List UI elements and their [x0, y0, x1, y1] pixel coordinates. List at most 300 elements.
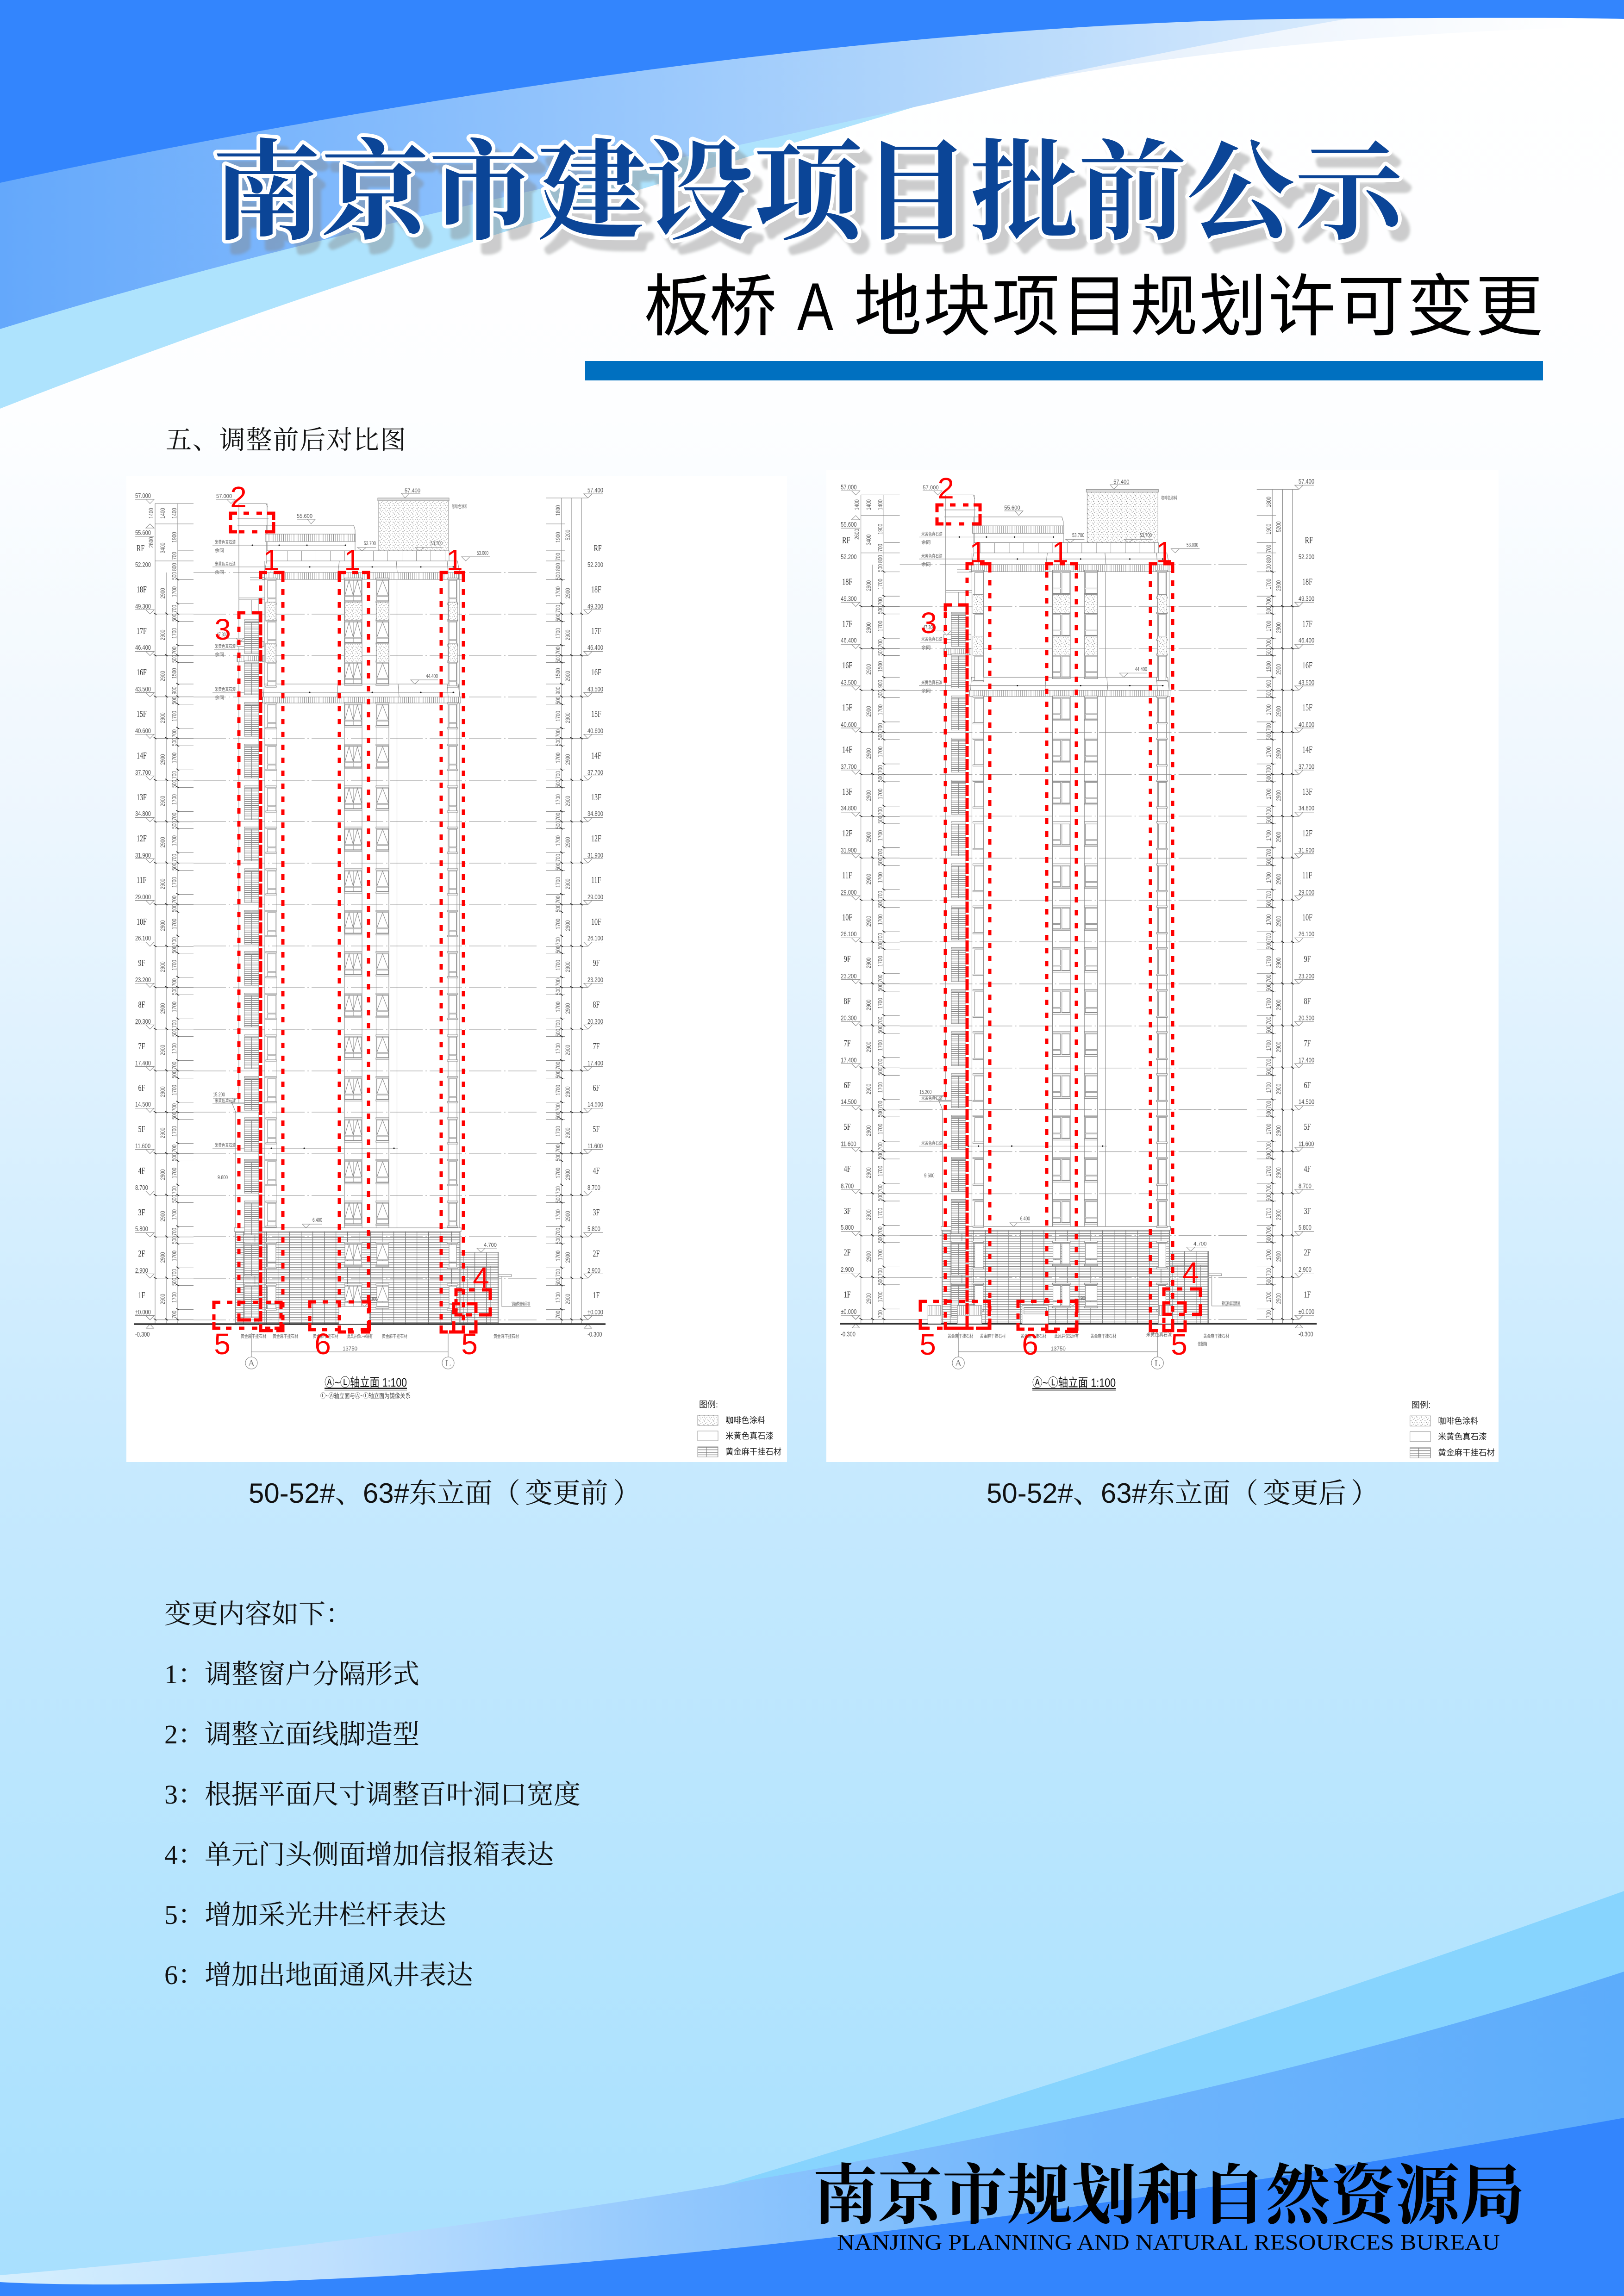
section heading: 五、调整前后对比图	[166, 420, 406, 457]
material notes: 黄金麻干挂石材	[313, 1333, 338, 1339]
floor labels left: 14F	[137, 751, 147, 761]
floor labels right: 1F	[1304, 1289, 1311, 1300]
top dimension labels: 800	[876, 555, 884, 563]
axis labels	[955, 1358, 1160, 1369]
top dimension labels: 700	[170, 552, 178, 560]
elevation labels right: 34.800	[1299, 804, 1314, 812]
axis labels: L	[1155, 1358, 1160, 1369]
footer swoosh: mid blue layer	[0, 1972, 1624, 2296]
elevation labels right: ±0.000	[587, 1308, 603, 1316]
elevation labels left: 11.600	[841, 1140, 856, 1148]
floor labels left: 5F	[844, 1121, 851, 1132]
elevation labels left: 29.000	[841, 888, 856, 896]
floor labels right: 4F	[593, 1166, 600, 1176]
material notes: 黄金麻干挂石材	[1203, 1333, 1229, 1339]
elevation labels left: 52.200	[135, 560, 151, 568]
elevation labels right: 43.500	[1299, 678, 1314, 686]
axis labels: A	[955, 1358, 962, 1369]
floor labels left: 6F	[138, 1083, 145, 1093]
floor labels left: 18F	[137, 585, 147, 595]
elevation labels left: 11.600	[135, 1142, 150, 1150]
building elevation marks: 57.000	[216, 493, 232, 499]
floor labels left: 18F	[842, 576, 852, 587]
top dimension labels: 800	[1265, 555, 1272, 563]
building elevation marks: 6.400	[312, 1217, 322, 1223]
floor labels left: 2F	[844, 1247, 851, 1257]
building elevation marks: 53.000	[1187, 542, 1198, 548]
material notes: 余同	[215, 548, 224, 554]
elevation labels left: 20.300	[841, 1014, 856, 1022]
elevation labels right: 5.800	[587, 1225, 600, 1232]
elevation labels left	[135, 492, 151, 1338]
floor labels left: 1F	[138, 1290, 145, 1300]
floor labels right: 13F	[1302, 786, 1312, 797]
header swoosh: pale cyan layer	[0, 0, 1624, 409]
ground railings and ventilation shaft	[928, 1306, 1173, 1324]
floor labels left: 17F	[842, 618, 852, 629]
elevation labels left: 14.500	[841, 1098, 856, 1106]
floor labels left: 12F	[842, 828, 852, 838]
elevation labels left: 23.200	[135, 976, 151, 983]
top dimension labels: 700	[554, 553, 562, 561]
change list: 3：根据平面尺寸调整百叶洞口宽度	[164, 1780, 581, 1810]
legend: 米黄色真石漆	[1438, 1432, 1487, 1442]
floor labels right: RF	[1305, 535, 1313, 545]
elevation labels right: 11.600	[587, 1142, 603, 1150]
material notes: 米黄色真石漆	[215, 561, 236, 567]
building elevation marks: 57.000	[923, 484, 939, 491]
elevation labels right: 2.900	[587, 1266, 600, 1274]
elevation labels left: 55.600	[841, 521, 856, 529]
elevation labels right: 40.600	[1299, 721, 1314, 728]
material notes: 余同	[215, 569, 224, 575]
elevation labels right: 2.900	[1299, 1265, 1312, 1274]
elevation labels left: 8.700	[841, 1182, 854, 1190]
caption: before: 50-52#、63#东立面（变更前）	[249, 1478, 641, 1509]
drawing: building elevation before	[134, 493, 718, 1457]
floor labels right: 3F	[1304, 1205, 1311, 1216]
floor labels left: 15F	[137, 709, 147, 719]
material notes: 米黄色真石漆	[1146, 1332, 1172, 1338]
top dimension labels: 1900	[876, 524, 884, 535]
top dimension labels: 2600	[147, 537, 155, 548]
material notes: 余同	[921, 540, 931, 546]
footer swoosh: solid blue layer	[0, 2118, 1624, 2296]
floor labels right	[1302, 535, 1313, 1300]
floor labels left: 1F	[844, 1289, 851, 1300]
red numbers before: 5	[214, 1327, 231, 1361]
building elevation marks: 44.400	[1135, 666, 1147, 672]
floor labels left: 3F	[138, 1207, 145, 1218]
floor labels right: 2F	[593, 1249, 600, 1259]
top dimension labels: 1900	[1265, 524, 1272, 535]
subtitle bar	[585, 361, 1543, 380]
elevation labels left: 46.400	[135, 643, 151, 651]
building elevation marks: 53.700	[1140, 532, 1152, 538]
floor labels left: 2F	[138, 1249, 145, 1259]
building elevation marks: 15.200	[919, 1089, 932, 1095]
building elevation marks: 47.300	[217, 631, 228, 638]
floor labels right: 15F	[591, 709, 601, 719]
elevation labels right: 5.800	[1299, 1224, 1312, 1232]
material notes: 米黄色真石漆	[921, 553, 943, 559]
floor labels left: 8F	[844, 996, 851, 1006]
material notes: 黄金麻干挂石材	[1090, 1333, 1116, 1339]
floor labels left: 16F	[137, 667, 147, 678]
material notes: 黄金麻干挂石材	[493, 1333, 519, 1339]
red numbers before: 2	[230, 480, 247, 514]
floor labels right: 5F	[1304, 1121, 1311, 1132]
floor labels left: 5F	[138, 1124, 145, 1134]
drawing caption	[320, 1375, 411, 1400]
floor labels left: 7F	[138, 1041, 145, 1052]
floor labels right: 14F	[1302, 744, 1312, 755]
material notes: 黄金麻干挂石材	[273, 1333, 298, 1339]
elevation labels right: 17.400	[587, 1059, 603, 1067]
elevation labels right: ±0.000	[1299, 1307, 1314, 1315]
top dimension labels: 3400	[865, 535, 872, 545]
footer agency name: 南京市规划和自然资源局	[813, 2143, 1524, 2237]
floor labels left: 9F	[844, 953, 851, 964]
top dimension labels: 3400	[159, 542, 166, 554]
floor labels right: 16F	[1302, 660, 1312, 671]
material notes: 钢结构玻璃雨棚	[512, 1301, 530, 1307]
building elevation marks: 44.400	[426, 673, 438, 679]
elevation labels left: 34.800	[135, 809, 151, 817]
floor labels right: 13F	[591, 792, 601, 803]
floor labels left: 9F	[138, 958, 145, 968]
elevation labels left: 49.300	[135, 602, 151, 610]
red numbers before: 3	[214, 613, 231, 646]
floor labels right: 12F	[1302, 828, 1312, 838]
legend: 咖啡色涂料	[1438, 1416, 1478, 1425]
top dimension labels: 1800	[554, 505, 562, 516]
elevation labels right: 14.500	[587, 1100, 603, 1108]
red numbers before: 1	[263, 543, 280, 577]
floor labels left: 14F	[842, 744, 852, 755]
floor labels right: 18F	[591, 585, 601, 595]
elevation labels right: 37.700	[587, 768, 603, 776]
red numbers before	[214, 480, 489, 1361]
change list: 4：单元门头侧面增加信报箱表达	[164, 1840, 554, 1870]
floor labels right: 7F	[593, 1041, 600, 1052]
material notes: 余同	[215, 695, 224, 701]
floor labels left: 4F	[844, 1163, 851, 1174]
floor labels left: 10F	[137, 917, 147, 927]
floor labels right: 2F	[1304, 1247, 1311, 1257]
floor labels left: RF	[842, 535, 850, 545]
building elevation marks: 9.600	[924, 1172, 935, 1179]
elevation labels left: 29.000	[135, 893, 151, 901]
elevation labels right: -0.300	[1299, 1330, 1313, 1338]
floor labels right: 17F	[1302, 618, 1312, 629]
building elevation marks: 4.700	[1193, 1241, 1207, 1247]
building elevation marks: 53.700	[1072, 532, 1085, 538]
elevation labels left: 57.000	[135, 492, 151, 499]
elevation labels left	[841, 483, 856, 1338]
building elevation marks	[213, 487, 497, 1352]
top dimension labels: 1400	[159, 508, 166, 518]
panel: before elevation	[126, 476, 787, 1462]
elevation labels right: 49.300	[587, 602, 603, 610]
building elevation marks: 57.400	[1113, 479, 1130, 485]
floor labels right: 12F	[591, 834, 601, 844]
elevation labels right: 23.200	[1299, 972, 1314, 980]
footer swoosh: cyan layer	[602, 1891, 1624, 2221]
top dimension labels: 1900	[170, 532, 178, 542]
elevation labels left: 31.900	[841, 846, 856, 854]
material notes: 黄金麻干挂石材	[980, 1333, 1006, 1339]
building elevation marks: 4.700	[484, 1242, 497, 1248]
elevation labels right: 52.200	[1299, 553, 1314, 560]
floor labels left: 6F	[844, 1080, 851, 1090]
elevation labels right: 34.800	[587, 809, 603, 817]
floor labels left: 3F	[844, 1205, 851, 1216]
white door on ground	[339, 1307, 369, 1324]
elevation labels right: 8.700	[1299, 1182, 1312, 1190]
title: 南京市建设项目批前公示	[212, 106, 1410, 261]
floor labels right: 14F	[591, 751, 601, 761]
red numbers after: 1	[1052, 535, 1068, 569]
floor labels right: 9F	[593, 958, 600, 968]
red numbers before: 5	[461, 1327, 478, 1361]
change list: 1：调整窗户分隔形式	[164, 1659, 419, 1689]
material notes: 米黄色真石漆	[215, 686, 236, 692]
top dimension labels: 800	[554, 563, 562, 571]
elevation labels left: 26.100	[135, 934, 151, 942]
change list: 6：增加出地面通风井表达	[164, 1960, 473, 1990]
floor labels left: 15F	[842, 702, 852, 713]
floor labels right: 5F	[593, 1124, 600, 1134]
elevation labels right: 31.900	[587, 851, 603, 859]
material notes: 黄金麻干挂石材	[948, 1333, 973, 1339]
floor labels left	[842, 535, 852, 1300]
floor labels right: 11F	[591, 875, 601, 885]
material notes: 米黄色真石漆	[215, 643, 236, 649]
floor labels left: 13F	[842, 786, 852, 797]
building elevation marks: 13750	[343, 1345, 357, 1352]
legend: 咖啡色涂料	[725, 1416, 765, 1425]
elevation labels left: 52.200	[841, 553, 856, 560]
top dimension labels: 1400	[170, 508, 178, 518]
elevation labels right: 26.100	[1299, 930, 1314, 938]
top dimension labels: 1400	[853, 499, 861, 510]
elevation labels right: 37.700	[1299, 763, 1314, 771]
material notes: 此风井仅L~A轴有	[347, 1333, 373, 1339]
drawing caption: Ⓛ~Ⓐ轴立面与Ⓐ~Ⓛ轴立面为镜像关系	[320, 1392, 411, 1400]
elevation labels right: 23.200	[587, 976, 603, 983]
material notes: 米黄色真石漆	[921, 636, 943, 642]
elevation labels right: 29.000	[587, 893, 603, 901]
floor labels right: 10F	[591, 917, 601, 927]
elevation labels right: 29.000	[1299, 888, 1314, 896]
elevation labels right	[1299, 478, 1314, 1338]
top dimension labels: 700	[876, 544, 884, 552]
elevation labels left: 46.400	[841, 636, 856, 644]
elevation labels right: 46.400	[587, 643, 603, 651]
legend: 图例:	[1412, 1400, 1430, 1410]
material notes: 黄金麻干挂石材	[241, 1333, 266, 1339]
material notes: 余同	[921, 561, 931, 567]
material notes: 余同	[215, 652, 224, 658]
floor labels left: 16F	[842, 660, 852, 671]
floor labels right: 8F	[1304, 996, 1311, 1006]
top dimension labels: 800	[170, 563, 178, 571]
elevation labels right: 31.900	[1299, 846, 1314, 854]
red dashed markers before	[214, 513, 490, 1332]
footer english name: NANJING PLANNING AND NATURAL RESOURCES BUREAU	[837, 2230, 1500, 2255]
subtitle: A	[797, 269, 833, 344]
elevation labels left: 49.300	[841, 595, 856, 603]
elevation labels left: 43.500	[135, 685, 151, 693]
top dimension labels: 5200	[564, 529, 571, 541]
elevation labels right: 57.400	[587, 486, 603, 494]
floor labels left: 10F	[842, 912, 852, 922]
floor labels right	[591, 543, 602, 1300]
change list: 5：增加采光井栏杆表达	[164, 1900, 446, 1930]
material notes: 米黄色真石漆	[215, 1142, 236, 1148]
red numbers after: 1	[969, 535, 986, 569]
floor labels right: 1F	[593, 1290, 600, 1300]
elevation labels left: 23.200	[841, 972, 856, 980]
elevation labels right: 57.400	[1299, 478, 1314, 485]
material notes: 米黄色真石漆	[215, 1098, 236, 1104]
top dimension labels: 700	[1265, 545, 1272, 553]
floor labels left: 11F	[842, 870, 852, 880]
floor labels right: RF	[594, 543, 602, 554]
floor labels left: 12F	[137, 834, 147, 844]
floor labels right: 8F	[593, 1000, 600, 1010]
axis labels	[248, 1358, 451, 1369]
material notes: 余同	[921, 645, 931, 651]
legend: 图例:	[699, 1400, 718, 1409]
material notes: 黄金麻干挂石材	[382, 1333, 407, 1339]
elevation labels right: 40.600	[587, 727, 603, 734]
elevation labels left: 8.700	[135, 1183, 148, 1191]
change list	[164, 1599, 581, 1990]
building elevation marks: 9.600	[218, 1174, 228, 1181]
red numbers after: 2	[937, 472, 954, 505]
elevation labels right: 17.400	[1299, 1056, 1314, 1064]
red dashed markers after	[920, 505, 1200, 1332]
elevation labels right: 46.400	[1299, 636, 1314, 644]
floor labels right: 16F	[591, 667, 601, 678]
elevation labels left: 40.600	[135, 727, 151, 734]
floor labels right: 3F	[593, 1207, 600, 1218]
elevation labels right: 11.600	[1299, 1140, 1314, 1148]
material notes: 米黄色真石漆	[215, 539, 236, 545]
red numbers after: 4	[1182, 1256, 1199, 1289]
elevation labels left: 5.800	[841, 1224, 854, 1232]
building elevation marks: 15.200	[213, 1091, 225, 1098]
elevation labels right: 20.300	[1299, 1014, 1314, 1022]
red numbers after: 3	[920, 606, 937, 640]
elevation labels left: 2.900	[841, 1265, 854, 1274]
elevation labels right: 49.300	[1299, 595, 1314, 603]
elevation labels left: -0.300	[841, 1330, 856, 1338]
elevation labels left: 57.000	[841, 483, 856, 491]
top dimension labels: 1400	[876, 499, 884, 510]
floor labels left	[137, 543, 147, 1300]
building elevation marks	[919, 479, 1207, 1352]
axis labels: L	[445, 1358, 451, 1369]
material notes: 米黄色真石漆	[921, 1095, 943, 1101]
legend: 黄金麻干挂石材	[725, 1447, 781, 1456]
material notes: 米黄色真石漆	[921, 1140, 943, 1146]
elevation labels right: 20.300	[587, 1017, 603, 1025]
red numbers after: 1	[1156, 535, 1173, 569]
floor labels right: 9F	[1304, 953, 1311, 964]
building elevation marks: 53.700	[364, 540, 376, 547]
building elevation marks: 53.000	[477, 550, 488, 556]
floor labels right: 4F	[1304, 1163, 1311, 1174]
elevation labels right: -0.300	[587, 1330, 602, 1338]
elevation labels right: 52.200	[587, 560, 603, 568]
floor labels right: 10F	[1302, 912, 1312, 922]
change list: 变更内容如下：	[164, 1599, 352, 1629]
elevation labels left: 14.500	[135, 1100, 151, 1108]
material notes: 此风井仅52#有	[1055, 1333, 1079, 1339]
building elevation marks: 0.900	[1078, 1295, 1086, 1302]
elevation labels left: 5.800	[135, 1225, 148, 1232]
floor labels left: 8F	[138, 1000, 145, 1010]
building elevation marks: 55.600	[297, 513, 312, 519]
floor labels left: 11F	[137, 875, 146, 885]
building elevation marks: 6.400	[1020, 1215, 1030, 1222]
drawing: building elevation after	[840, 478, 1495, 1458]
top dimension labels: 1400	[147, 508, 155, 518]
floor labels left: 4F	[138, 1166, 145, 1176]
header swoosh: solid blue layer	[0, 0, 1624, 183]
building elevation marks: 57.400	[405, 487, 420, 494]
building elevation marks: 13750	[1050, 1345, 1066, 1352]
material notes: 咖啡色涂料	[452, 504, 468, 510]
floor labels left: 13F	[137, 792, 147, 803]
elevation labels right	[587, 486, 603, 1338]
building elevation marks: 53.700	[431, 540, 443, 547]
drawing caption: Ⓐ~Ⓛ轴立面 1:100	[1032, 1376, 1116, 1390]
red numbers after	[919, 472, 1199, 1361]
elevation labels left: 20.300	[135, 1017, 151, 1025]
legend	[699, 1400, 781, 1456]
building elevation marks: 0.900	[369, 1296, 377, 1302]
drawing caption: Ⓐ~Ⓛ轴立面 1:100	[325, 1375, 407, 1389]
elevation labels left: ±0.000	[135, 1308, 151, 1316]
top dimension labels: 1900	[554, 532, 562, 542]
caption: after: 50-52#、63#东立面（变更后）	[987, 1478, 1379, 1509]
floor labels right: 6F	[593, 1083, 600, 1093]
elevation labels left: -0.300	[135, 1330, 150, 1338]
floor labels left: RF	[137, 543, 144, 554]
material notes: 黄金麻干挂石材	[1021, 1333, 1046, 1339]
elevation labels right: 8.700	[587, 1183, 600, 1191]
elevation labels left: 55.600	[135, 529, 151, 536]
red numbers before: 6	[314, 1327, 331, 1361]
material notes: 钢结构玻璃雨棚	[1222, 1300, 1240, 1307]
floor labels right: 18F	[1302, 576, 1312, 587]
red numbers before: 1	[344, 543, 361, 577]
floor labels right: 17F	[591, 626, 601, 636]
header swoosh: mid blue layer	[0, 0, 1346, 329]
elevation labels left: 40.600	[841, 721, 856, 728]
top dimension labels: 5200	[1274, 521, 1282, 532]
top dimension labels: 2600	[853, 529, 861, 540]
red numbers before: 4	[473, 1261, 489, 1294]
subtitle: 板桥	[644, 269, 777, 344]
panel: after elevation	[826, 470, 1499, 1462]
top dimension labels: 1400	[865, 499, 872, 510]
elevation labels left: 17.400	[135, 1059, 151, 1067]
